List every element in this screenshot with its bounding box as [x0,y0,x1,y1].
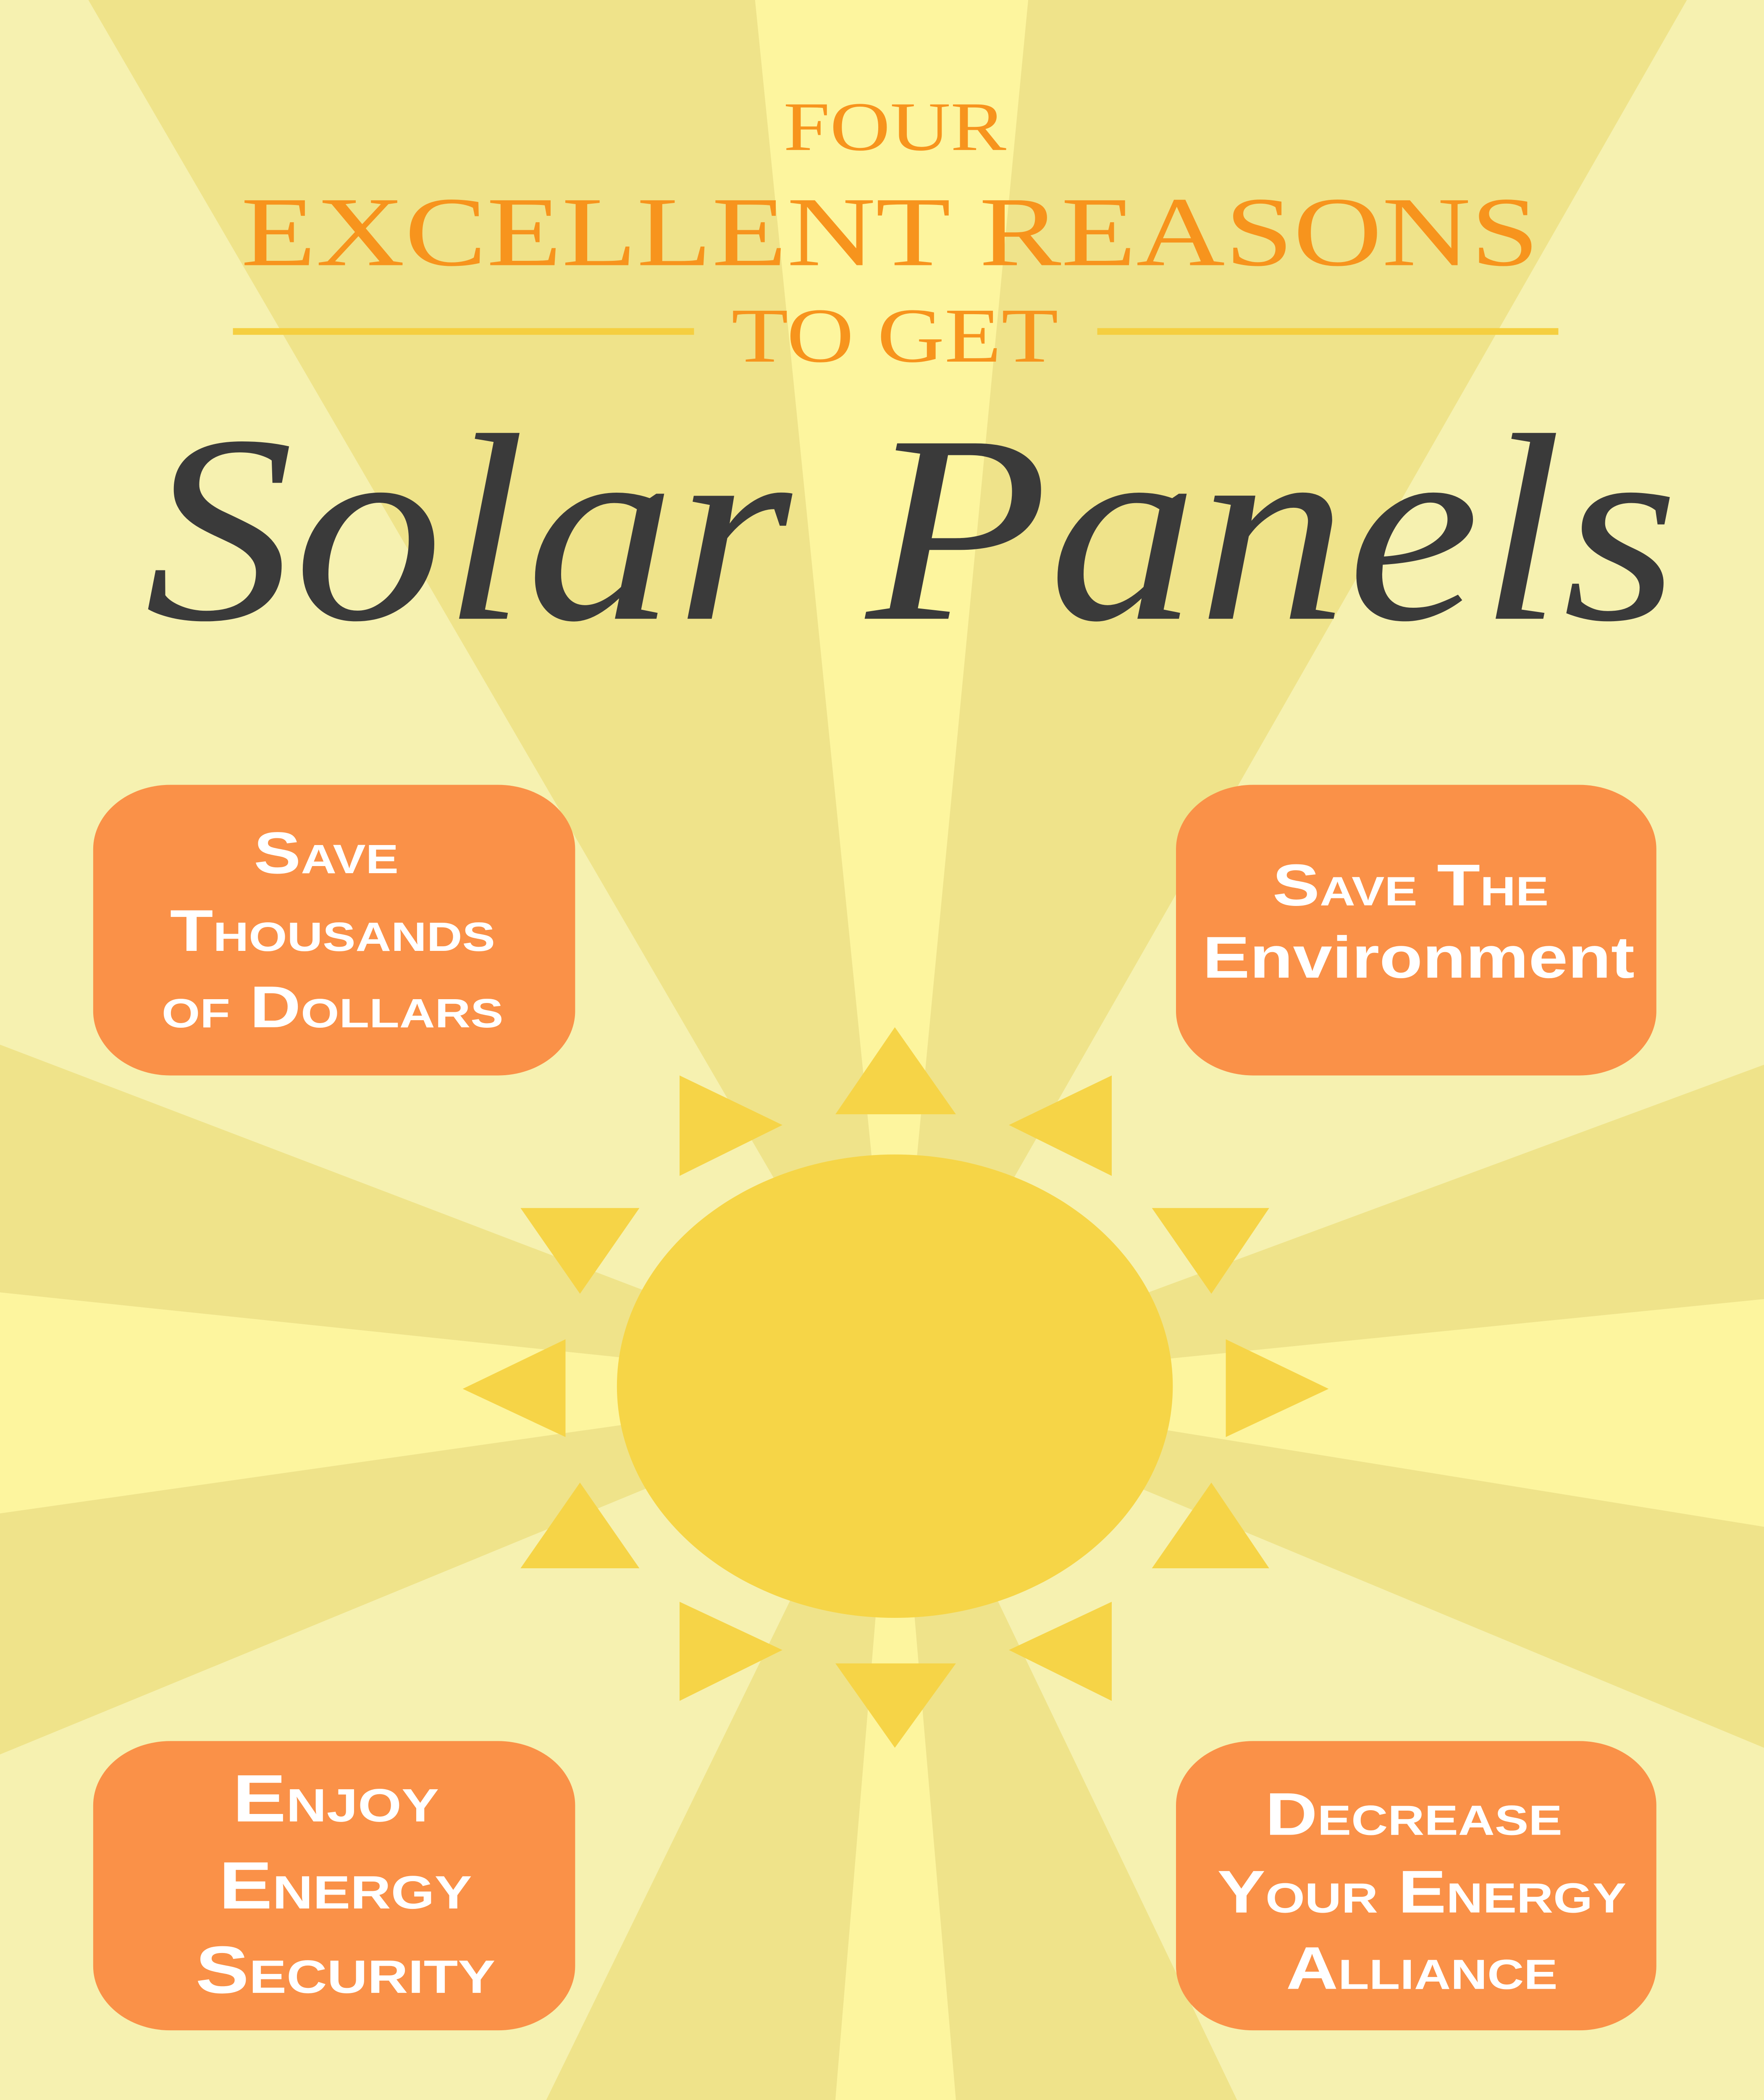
title [233,88,1558,379]
box: enjoy energy security [93,1741,575,2030]
title: TO GET [731,293,1058,379]
title: FOUR [783,88,1006,165]
box: save thousands of dollars: Thousands [170,898,495,963]
box: decrease your energy alliance: Decrease [1265,1780,1562,1848]
box: save thousands of dollars: Save [254,820,399,886]
box: save the environment: Save The [1273,852,1549,918]
script title: Solar Panels: Solar Panels [144,380,1679,677]
box: enjoy energy security: Security [195,1933,495,2007]
box: decrease your energy alliance [1176,1741,1656,2030]
box: decrease your energy alliance: Alliance [1286,1935,1558,2002]
box: enjoy energy security: Enjoy [233,1761,439,1836]
box: save thousands of dollars: of Dollars [162,974,504,1040]
box: save the environment: Environment [1202,924,1635,990]
title: EXCELLENT REASONS [241,177,1539,287]
box: save thousands of dollars [93,785,575,1076]
box: save the environment [1176,785,1656,1076]
box: enjoy energy security: Energy [219,1848,472,1923]
sun [463,1027,1328,1748]
box: decrease your energy alliance: Your Energy [1217,1858,1626,1925]
